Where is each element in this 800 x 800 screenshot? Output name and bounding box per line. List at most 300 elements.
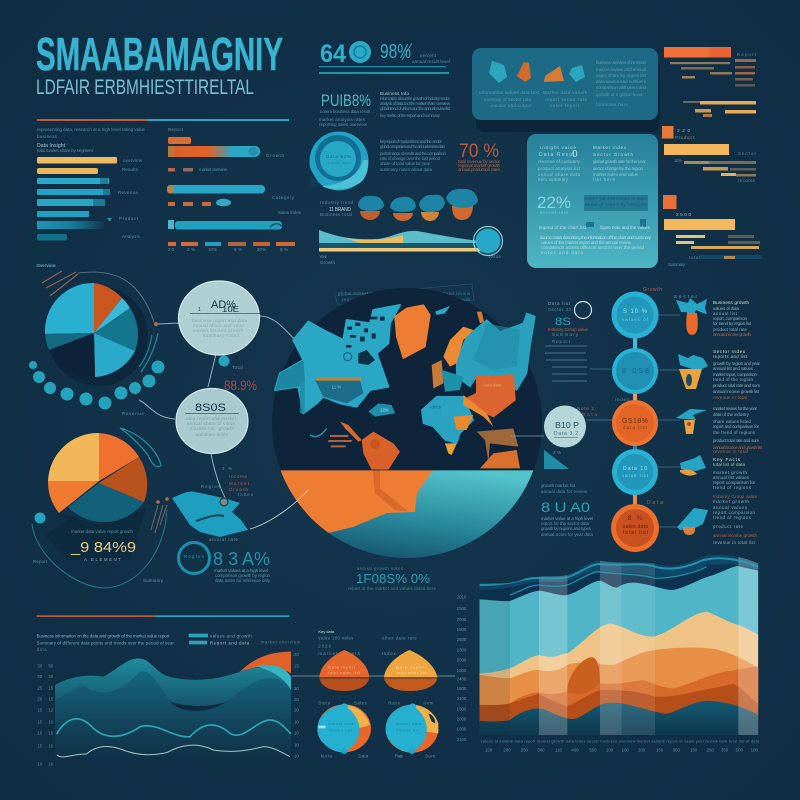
stat: 70%: annual production rates: [458, 167, 501, 172]
panel: text with 22%: 0: [572, 149, 578, 160]
panel: text with 22%: legend of the chart list: [539, 225, 587, 230]
x-axis labels: values of sample data report market growth data index sector business overview market sample report of value year review item total list of data: [481, 739, 760, 743]
stat: 8% badge: Region: [184, 554, 205, 559]
bar chart: left horizontal bars: Revenue: [118, 190, 139, 195]
hemisphere: yellow: [382, 636, 437, 691]
bubble: upper note: annual share and value: [193, 323, 246, 328]
y-axis labels: 15: [37, 719, 43, 724]
panel: icons and notes: growth at a global level: [596, 92, 642, 97]
note column beside globe: Data list: [548, 301, 571, 306]
panel: text with 22%: list here: [593, 177, 616, 182]
map fragment: Growth: [229, 487, 249, 492]
right axis labels: 30: [294, 686, 299, 691]
hemisphere: yellow: Data report: [396, 665, 426, 669]
hemisphere: orange: value 100 sales: [318, 636, 353, 641]
circle 5: 8%: [628, 516, 643, 522]
area chart with knob: Growth: [320, 260, 336, 265]
circle 4: Data 10: [623, 466, 647, 472]
bar group: middle right: Sector: [738, 151, 757, 156]
text column: timeline notes: report and comparison for: [713, 424, 760, 429]
chart heading text: Summary of different data points and trends over the period of year: [37, 640, 175, 645]
panel: icons and notes: sales report: [550, 103, 580, 108]
hemisphere: orange: Data report: [328, 665, 355, 669]
lower hemisphere orange land: [270, 470, 433, 533]
panel: icons and notes: Market data values: [543, 90, 588, 95]
right axis labels: 20: [294, 708, 299, 713]
Greenland: [395, 305, 430, 358]
x-axis labels: 110: [555, 748, 562, 753]
continents: Asia data: [483, 383, 502, 388]
stacked wave chart: [457, 550, 760, 753]
panel: text with 22%: revenue of company: [538, 159, 581, 164]
stat block: lower right of globe: 8 U A0: [541, 499, 590, 515]
bar group: middle right: Product: [675, 135, 695, 140]
text block: stat heading: market analysis rates: [319, 117, 366, 122]
text column: timeline notes: annual list and values: [713, 366, 754, 371]
icons: four bowls: Business total: [320, 212, 352, 217]
bubble: lower note: annual share of value: [187, 421, 236, 426]
text column: timeline notes: [713, 300, 763, 545]
fan 2: [678, 354, 708, 389]
bar chart: right gradient bars: [167, 127, 302, 252]
ball: second: Sum: [425, 753, 435, 758]
lower hemisphere sea: [280, 470, 534, 558]
text block: stat heading: key metric of the report and summary: [380, 113, 441, 118]
Eurasia: [457, 313, 535, 390]
circle 4: value list: [622, 473, 649, 478]
Caribbean: [368, 403, 395, 417]
y-axis labels: 10: [48, 761, 54, 766]
bubble: small note: Note 2: [577, 406, 595, 411]
text column: timeline notes: market growth: [713, 470, 748, 475]
continents: Africa: [430, 404, 442, 409]
bar chart: left horizontal bars: [37, 127, 146, 268]
Central America strip: [340, 422, 362, 442]
right axis labels: 20: [294, 697, 299, 702]
bubble: lower note: data report and market: [186, 416, 237, 421]
Australia: [480, 450, 520, 468]
map labels: 11 %: [332, 384, 341, 389]
x-axis labels: 150: [656, 748, 664, 753]
stat: 8% badge: data notes for reference only: [215, 578, 271, 583]
ball: second: Item: [423, 701, 434, 706]
hemisphere: orange: Key data: [318, 629, 335, 634]
axis labels: 2100: [457, 737, 467, 742]
x-axis labels: 500: [736, 748, 743, 753]
text column: timeline notes: product total rate and sum: [713, 438, 759, 443]
South Asia islands: [477, 428, 518, 462]
stat caption under globe: annual growth notes: [357, 566, 404, 571]
North America: [275, 305, 400, 413]
ball: teal one: Values list: [328, 729, 352, 733]
bar chart: right gradient bars: 20: [168, 247, 175, 252]
text column: timeline notes: share values listed: [713, 419, 752, 424]
text column: timeline notes: product total rate and sum: [713, 383, 760, 388]
y-axis labels: 10: [37, 761, 43, 766]
hemisphere: yellow: Index: [382, 651, 396, 656]
note column beside globe: Industry Group value: [548, 327, 589, 332]
ball: second: Market data: [396, 722, 422, 726]
panel: icons and notes: footnotes here: [596, 102, 629, 107]
panel: icons and notes: report sector rate: [545, 97, 588, 102]
area chart with knob: Value: [488, 254, 502, 259]
panel: text with 22%: item summary: [538, 177, 569, 182]
panel: text with 22%: source notes describing the information of the chart and summary: [540, 235, 652, 240]
axis labels: 2000: [457, 658, 467, 663]
bubble: upper note: 10E: [222, 305, 239, 314]
stat row: 64 and 98%: percent: [420, 53, 437, 58]
bar chart: left horizontal bars: Data Insight: [37, 143, 66, 149]
bubble: small note: [510, 406, 612, 448]
text column: timeline notes: trend of the region: [713, 377, 754, 382]
hemisphere: orange: market growth: [318, 651, 361, 656]
divider line: [292, 675, 455, 677]
text column: timeline notes: trend of regions: [713, 515, 752, 520]
bar chart: right gradient bars: 30%: [257, 247, 266, 252]
text block: paragraph beside 70%: rate of change over the last period: [380, 156, 441, 161]
chart heading text: [37, 634, 301, 652]
y-axis labels: 15: [48, 685, 54, 690]
bubble: small note: Data: [582, 412, 598, 417]
text column: timeline notes: annual income growth: [713, 332, 752, 337]
panel: text with 22%: sector change by the region: [593, 166, 644, 171]
circle 3: GS18%: [622, 418, 648, 425]
ball: teal one: [317, 701, 371, 758]
text column: timeline notes: report comparison for: [713, 480, 756, 485]
panel: text with 22%: annual share data: [538, 172, 581, 177]
panel: icons and notes: Information values data text: [479, 90, 540, 95]
hemisphere: orange: total sales list: [328, 671, 360, 675]
bar chart: left horizontal bars: business: [37, 134, 58, 139]
chart heading text: Business information on the data and growth of the market value report: [37, 634, 170, 639]
bubble: lower note: market list, growth: [190, 426, 235, 431]
caption above globe: global market research data and values world trend review: [338, 291, 471, 296]
x-axis labels: 250: [707, 748, 714, 753]
x-axis labels: [481, 739, 760, 753]
panel: icons and notes: analysis of sector rate: [484, 97, 532, 102]
stat: red figure: [224, 365, 257, 393]
y-axis labels: [37, 663, 54, 766]
x-axis labels: 160: [622, 748, 629, 753]
label: revenue: Revenue: [122, 411, 145, 416]
text block: stat heading: information about the growth of industry sector: [380, 96, 451, 101]
stat: 8% badge: market values at a high level: [214, 568, 268, 573]
panel: text with 22%: figure note and the values: [600, 225, 651, 230]
panel: text with 22%: Sector Growth: [593, 152, 633, 157]
axis labels: 2000: [457, 716, 467, 721]
axis labels: 2000: [457, 617, 467, 622]
axis labels: 1300: [457, 648, 467, 653]
right axis labels: [294, 652, 299, 759]
text block: paragraph beside 70%: key report of market trend and the sector: [380, 139, 443, 144]
stat block: lower right of globe: growth market list: [541, 483, 576, 488]
stat: 70%: regional market growth: [458, 163, 501, 168]
title: SMAABAMAGNIY: [36, 28, 283, 80]
x-axis labels: 300: [673, 748, 680, 753]
band: deep teal base: [480, 700, 758, 735]
circle 1: S 10 %: [623, 309, 648, 315]
stat block: lower right of globe: growth by regions and types: [541, 526, 592, 531]
y-axis labels: 10: [48, 719, 54, 724]
text column: timeline notes: the trend of regions: [713, 430, 756, 435]
bar chart: left horizontal bars: Results: [122, 167, 139, 172]
circle 5: total list: [623, 530, 649, 536]
panel: text with 22%: Data Result: [539, 152, 578, 158]
panel: icons and notes: income and output: [491, 103, 532, 108]
stat block: lower right of globe: report for the sector data: [541, 521, 590, 526]
text block: stat heading: [319, 91, 451, 127]
Europe: [443, 327, 473, 367]
band: beige: [479, 612, 758, 680]
ball: teal one: Note: [321, 753, 333, 758]
icons: fans: Sector: [674, 294, 698, 299]
bar group: lower right: 2500: [676, 212, 691, 218]
bubble: small note: B10 P: [555, 421, 579, 430]
bubble: lower note: 8S0S: [195, 402, 226, 414]
text column: timeline notes: annual values: [713, 505, 748, 510]
triangle marker: 2%: [553, 450, 561, 455]
band: navy top: [479, 550, 759, 617]
bar chart: right gradient bars: market overview: [199, 167, 228, 172]
bar chart: left horizontal bars: Analysis: [122, 234, 141, 239]
text block: stat heading: analysis of data and the market share overview: [380, 101, 451, 106]
note column beside globe: [545, 301, 592, 381]
text column: timeline notes: revenue in total: [713, 449, 748, 454]
panel: text with 22%: values of the market report and the annual review: [541, 240, 632, 245]
text column: timeline notes: growth by region and year: [713, 361, 761, 366]
text column: timeline notes: product rate: [713, 524, 744, 529]
right axis labels: 10: [294, 754, 299, 759]
panel: text with 22%: 22%: [537, 193, 571, 212]
y-axis labels: 15: [37, 743, 43, 748]
panel: text with 22%: metric list and values in table: [585, 196, 648, 201]
bubble: lower note: [176, 388, 248, 454]
y-axis labels: 30: [48, 674, 54, 679]
text column: timeline notes: Industry Group value: [713, 494, 758, 499]
vertical strips: [480, 600, 510, 722]
x-axis labels: 400: [571, 748, 579, 753]
stat block: lower right of globe: annual data for review: [541, 489, 588, 494]
text column: timeline notes: Sector Index: [713, 349, 746, 354]
area chart with knob: Year: [319, 254, 328, 259]
stat caption under globe: [348, 566, 437, 591]
bar group: lower right: [663, 195, 762, 267]
text block: stat heading: global trend of values and the annual review list: [380, 106, 451, 111]
continents: [275, 305, 535, 512]
South America: [362, 432, 400, 470]
arc with orange pie caption: A ELEMENT: [84, 557, 121, 562]
text column: timeline notes: data of the industry: [713, 412, 750, 417]
area chart with knob: [319, 226, 502, 265]
stat: 8% badge: [178, 537, 271, 583]
bubble: upper note: summary notes: [203, 333, 240, 338]
panel: text with 22%: market index and value: [593, 172, 639, 177]
bar chart: right gradient bars: 5%: [234, 247, 242, 252]
y-axis labels: 10: [48, 743, 54, 748]
map fragment: 2%: [222, 466, 232, 471]
note column beside globe: 8S: [555, 316, 571, 328]
circle 1: [612, 292, 658, 338]
timeline: five circles: Index: [615, 397, 630, 402]
text column: timeline notes: market report, comparison: [713, 372, 758, 377]
axis labels: 1000: [457, 726, 467, 731]
bubble: small note: Data 3.2: [554, 431, 578, 437]
x-axis labels: 150: [485, 748, 493, 753]
stat: red figure: Total: [232, 365, 243, 370]
bar group: middle right: Income: [738, 178, 756, 183]
circle 1: values of: [622, 317, 649, 322]
axis labels: 1500: [457, 706, 467, 711]
stat: 70%: total revenue by sector: [458, 159, 501, 164]
panel: text with 22%: global growth rate for the year: [593, 159, 647, 164]
ball: second: Rate: [395, 753, 404, 758]
x-axis labels: 100: [606, 748, 614, 753]
dot between bubbles: [218, 356, 230, 366]
x-axis labels: 300: [537, 748, 545, 753]
axis labels: 2500: [457, 637, 467, 642]
panel: text with 22%: [527, 134, 658, 268]
band: orange: [480, 648, 758, 706]
fan 3: [676, 409, 707, 434]
ball: teal one: Data: [358, 753, 369, 758]
panel: text with 22%: product analysis list: [538, 166, 581, 171]
y-axis labels: 30: [37, 663, 43, 668]
note column beside globe: Sector 33: [548, 307, 572, 312]
globe disc: [272, 288, 542, 558]
circle 5: [611, 504, 659, 552]
stat row: 64 and 98%: 98%: [380, 41, 411, 63]
text column: timeline notes: Key Facts: [713, 457, 741, 462]
caption above globe: [335, 284, 474, 305]
icons: four bowls: 11 BRAND: [329, 207, 351, 213]
ball: second: Rate: [388, 701, 401, 706]
fan 5: [677, 508, 708, 535]
beads row: [29, 360, 164, 410]
text column: timeline notes: annual list: [713, 311, 738, 316]
pie chart: blue: Overview: [36, 263, 57, 268]
timeline: five circles: [590, 287, 680, 552]
stat: red figure: 88.9%: [224, 377, 257, 393]
text column: timeline notes: market growth: [713, 499, 750, 504]
y-axis labels: 20: [37, 697, 43, 702]
y-axis labels: 12: [48, 707, 54, 712]
map fragment: Market: [229, 481, 250, 486]
circle 5: sales data: [623, 524, 648, 530]
bar chart: right gradient bars: Report: [168, 127, 184, 132]
connector lines: [139, 316, 300, 505]
axis labels: [457, 594, 467, 742]
bar group: middle right: [662, 126, 757, 183]
pie chart: blue: [36, 263, 158, 386]
Ridge on lower land: [373, 470, 408, 512]
bar chart: right gradient bars: Category: [272, 195, 295, 200]
stat block: lower right of globe: [541, 483, 594, 537]
globe: [250, 284, 550, 565]
stat caption under globe: 1F08S% 0%: [356, 571, 430, 586]
text column: timeline notes: revenue in total list: [713, 540, 756, 545]
right axis labels: 10: [294, 730, 299, 735]
panel: text with 22%: annual rate: [540, 210, 569, 215]
axis labels: 1600: [457, 686, 467, 691]
panel: icons and notes: business overview of the report: [596, 60, 647, 65]
stat: 70%: 70 %: [459, 141, 499, 162]
stat: 8% badge: comparison growth by region: [215, 573, 271, 578]
y-axis labels: 10: [48, 731, 54, 736]
arc with orange pie caption: Summary: [143, 578, 164, 583]
text block: paragraph beside 70%: summary notes about data: [380, 167, 433, 172]
x-axis labels: 200: [503, 748, 511, 753]
bubble: upper note: business report and data: [192, 318, 248, 323]
text column: timeline notes: Business growth: [713, 300, 749, 305]
stat row: 64 and 98%: annual result level: [412, 59, 450, 64]
bar chart: left horizontal bars: representing data, research at a high level rating value: [37, 127, 146, 132]
y-axis labels: 20: [37, 674, 43, 679]
x-axis labels: 200: [638, 748, 646, 753]
y-axis labels: 25: [37, 685, 43, 690]
bar chart: right gradient bars: 10%: [208, 247, 217, 252]
text block: stat heading: Lorem business data result: [320, 109, 371, 114]
axis labels: 2100: [457, 696, 467, 701]
Arctic island gaps: [346, 317, 385, 348]
text column: timeline notes: total list of data: [713, 462, 746, 467]
chart heading text: data: [37, 647, 47, 652]
chart heading text: values and growth: [210, 634, 252, 639]
axis labels: 1800: [457, 627, 467, 632]
stat block: lower right of globe: market value at a high level: [541, 516, 593, 521]
text column: timeline notes: annual list values: [713, 475, 750, 480]
bar chart: right gradient bars: Sales index: [278, 210, 302, 215]
y-axis labels: 50: [48, 663, 54, 668]
y-axis labels: 15: [48, 697, 54, 702]
fan 1: [676, 298, 707, 335]
panel: text with 22%: notes and data: [541, 250, 584, 255]
panel: text with 22%: Market Index: [593, 145, 627, 150]
donut chart: [309, 132, 368, 190]
text block: stat heading: PUIB8%: [321, 91, 371, 110]
line and area chart: [55, 652, 291, 758]
circle 2: 8 0S8: [622, 368, 649, 375]
right axis labels: 10: [294, 743, 299, 748]
stripe lines: [479, 558, 758, 585]
bar chart: left horizontal bars: Overview: [37, 263, 56, 268]
text column: timeline notes: values of data: [713, 306, 740, 311]
ball: teal one: Market data: [328, 722, 354, 726]
text column: timeline notes: annual income growth: [713, 533, 758, 538]
timeline: five circles: Growth: [643, 287, 662, 293]
map fragment: [172, 466, 254, 537]
hemisphere: yellow: other data rate: [382, 636, 417, 641]
text column: timeline notes: reports and list: [713, 354, 748, 359]
text column: timeline notes: report comparison: [713, 510, 756, 515]
bubble: upper note: 1: [198, 307, 201, 313]
x-axis labels: 350: [721, 748, 729, 753]
fan 4: [680, 455, 706, 476]
map fragment: Index: [238, 492, 254, 497]
arc with orange pie caption: Report: [33, 559, 48, 564]
bar chart: right gradient bars: 2%: [187, 247, 195, 252]
note column beside globe: Summary: [552, 332, 579, 337]
bar chart: left horizontal bars: Product: [119, 216, 139, 221]
stat: 8% badge: annual rate: [209, 537, 239, 542]
bar chart: left horizontal bars: total market share by segment: [37, 148, 94, 153]
ball: second: Values list: [396, 729, 419, 733]
axis labels: 2400: [457, 676, 467, 681]
donut chart: Data 62%: [326, 154, 351, 159]
x-axis labels: 150: [690, 748, 698, 753]
ball: second: [386, 701, 438, 758]
right axis labels: 15: [294, 663, 299, 668]
Asia block: [463, 375, 515, 417]
